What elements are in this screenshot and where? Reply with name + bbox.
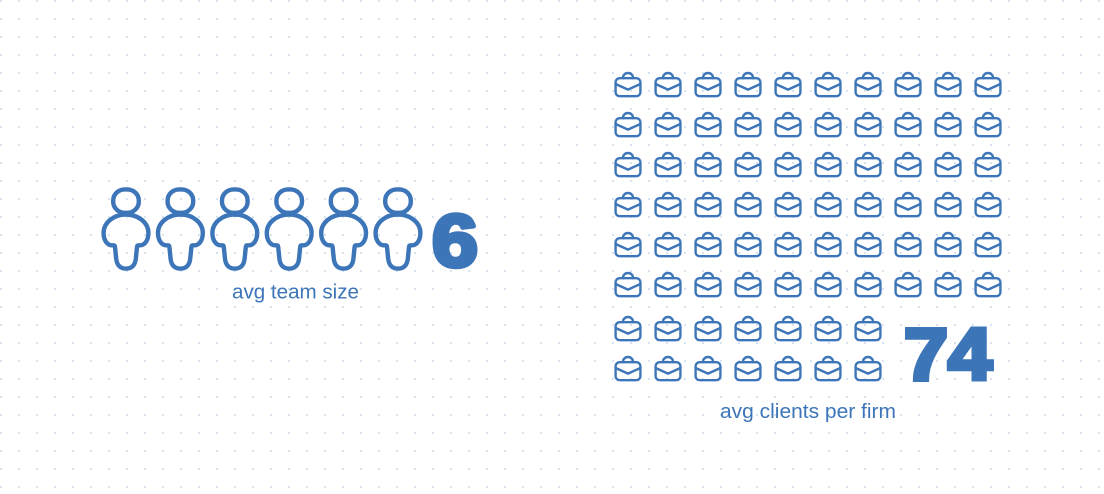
number: 74: 74	[904, 314, 992, 396]
label: avg clients per firm: avg clients per firm	[720, 401, 896, 423]
icon row: six people	[104, 189, 420, 269]
number: 6: 6	[432, 200, 478, 282]
panel: team size	[104, 189, 478, 304]
icon grid: briefcases	[616, 73, 1000, 380]
panel: clients per firm	[616, 73, 1000, 423]
label: avg team size: avg team size	[232, 282, 359, 304]
